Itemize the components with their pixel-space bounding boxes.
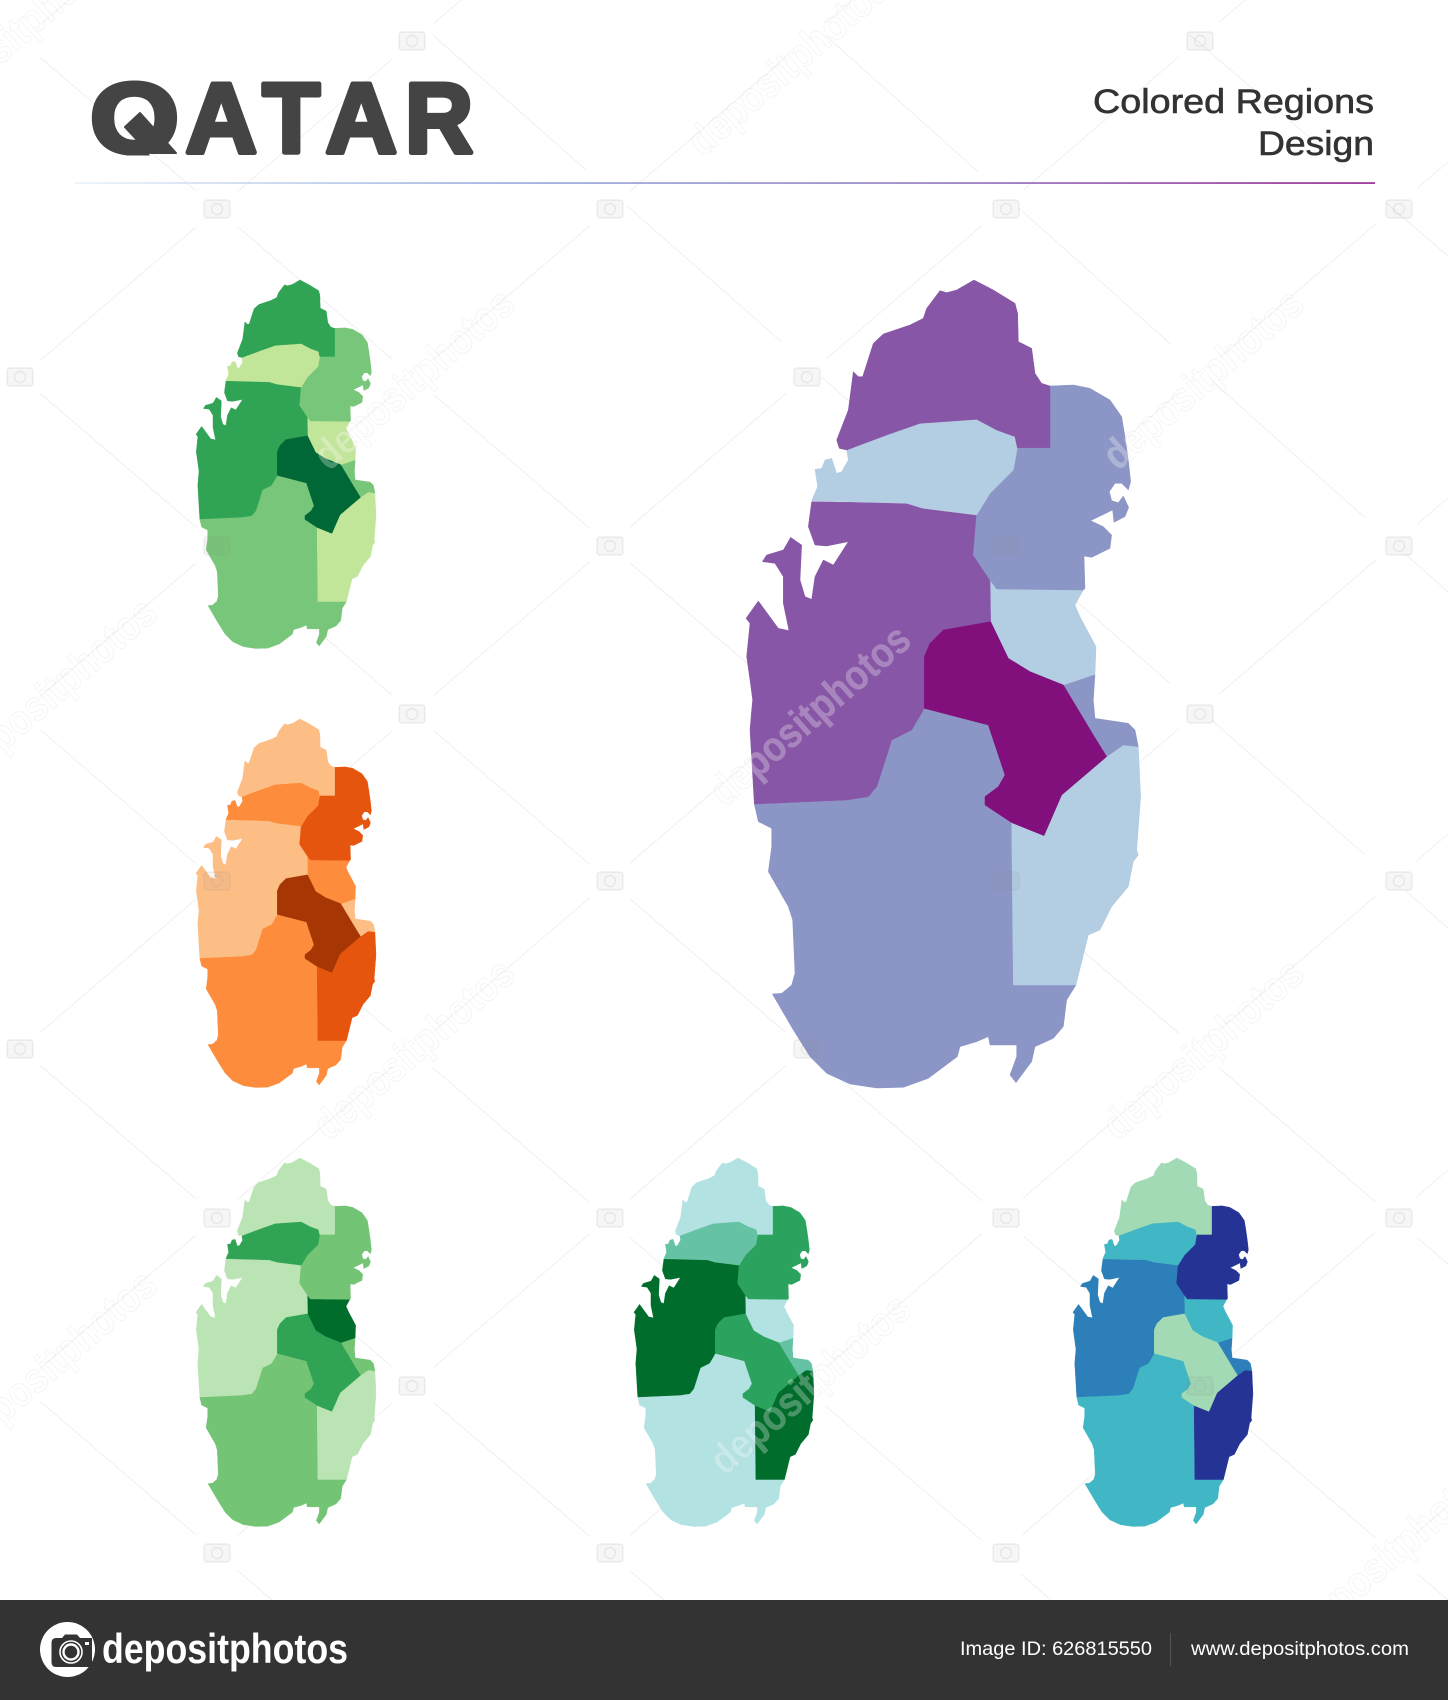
region: south-east	[1012, 745, 1141, 985]
map: light green variant	[196, 1158, 376, 1526]
header rule	[75, 182, 1375, 184]
region: south	[754, 708, 1076, 1088]
map: large purple variant	[746, 280, 1141, 1088]
watermark text: depositphotos	[304, 949, 523, 1148]
map: green variant 1	[196, 280, 376, 648]
title	[92, 80, 474, 156]
title letter Q: Q	[90, 62, 179, 174]
watermark text: depositphotos	[700, 615, 919, 814]
watermark text: depositphotos	[1093, 949, 1312, 1148]
map: blue variant	[1073, 1158, 1253, 1526]
title letters ATAR: T	[262, 62, 320, 174]
region: north-east	[973, 385, 1131, 590]
map: teal and green variant	[634, 1158, 814, 1526]
map: orange variant	[196, 719, 376, 1087]
watermark text: depositphotos	[700, 1284, 919, 1483]
watermark text: depositphotos	[1093, 279, 1312, 478]
region: east strip	[1063, 674, 1138, 757]
image id: Image ID: 626815550	[960, 1638, 1152, 1660]
title letters ATAR: R	[405, 62, 473, 174]
subtitle: Design	[1258, 125, 1374, 163]
region: east central	[990, 580, 1096, 685]
divider	[1170, 1633, 1171, 1666]
region: west	[746, 502, 991, 804]
region: north	[837, 280, 1050, 450]
title letters ATAR: A	[186, 62, 257, 174]
title letters ATAR: A	[326, 62, 397, 174]
footer bar	[0, 1600, 1448, 1700]
title letter Q tail	[125, 113, 176, 153]
subtitle	[1093, 83, 1374, 163]
region: central	[924, 622, 1107, 836]
title letters ATAR	[186, 62, 473, 174]
region: north-west central	[812, 419, 1017, 515]
website: www.depositphotos.com	[1190, 1638, 1409, 1660]
subtitle: Colored Regions	[1093, 83, 1374, 121]
watermark text: depositphotos	[304, 279, 523, 478]
icon: camera logo	[40, 1622, 95, 1677]
logo wordmark: depositphotos	[102, 1625, 348, 1672]
